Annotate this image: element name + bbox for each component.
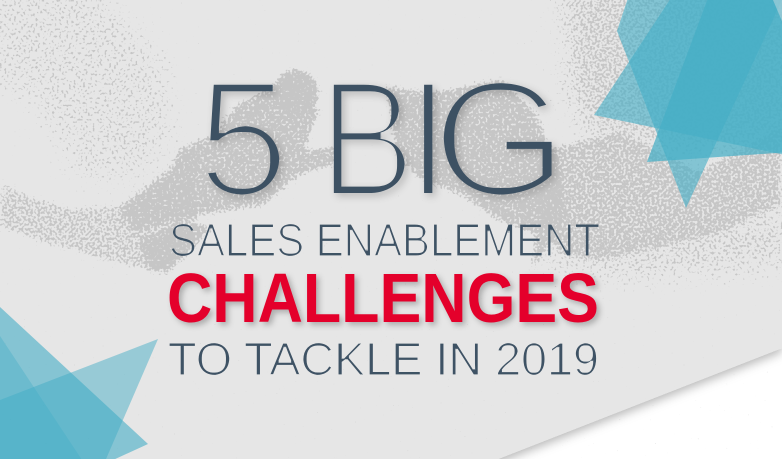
triangle: wide left: [594, 0, 782, 156]
left trailing band: [0, 150, 200, 275]
heading: 5 BIG: B: [319, 46, 415, 231]
right band: [540, 125, 782, 262]
sparse soft speckle fields: [0, 0, 782, 285]
band lower fringe: [540, 195, 782, 285]
sparse speckle top left: [0, 0, 180, 190]
heading: CHALLENGES: CHALLENGES: [167, 259, 599, 337]
triangle: inner left: [0, 336, 86, 459]
triangle: lower right: [647, 0, 782, 162]
triangle: pale spike: [617, 0, 782, 208]
top right translucent triangles: [594, 0, 782, 208]
left player body: [120, 69, 338, 272]
heading: 5 BIG: G: [432, 47, 568, 232]
subheading: TO TACKLE IN 2019: TO TACKLE IN 2019: [168, 333, 599, 385]
bottom left translucent triangles: [0, 307, 158, 459]
speckled silhouette of two football players: [0, 69, 782, 275]
heading: 5 BIG: [197, 46, 568, 232]
triangle: right pointing: [0, 339, 158, 459]
triangle: right sliver: [773, 0, 782, 40]
heading: 5 BIG: 5: [197, 47, 289, 232]
right player body: [385, 78, 565, 272]
heading: 5 BIG: I: [407, 46, 449, 231]
subheading: SALES ENABLEMENT: SALES ENABLEMENT: [169, 214, 600, 266]
triangle: upper left: [0, 307, 148, 459]
top centre right speckle: [555, 0, 640, 155]
